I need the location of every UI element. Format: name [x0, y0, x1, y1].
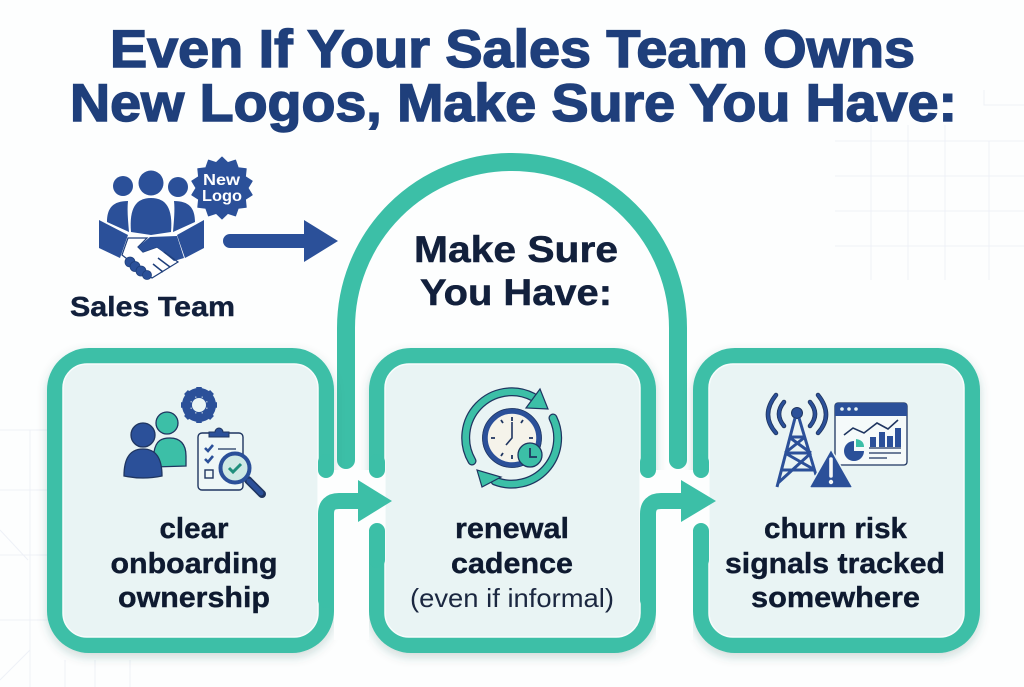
text: clear onboarding ownership [110, 513, 278, 614]
text: renewal cadence: cadence [451, 548, 573, 580]
title: New Logos, Make Sure You Have: [70, 74, 957, 133]
panel: clear onboarding ownership [47, 348, 334, 653]
badge: new logo: Logo [202, 188, 242, 205]
flow gaps in panel borders [318, 470, 709, 640]
title: Even If Your Sales Team Owns [110, 20, 915, 79]
arch connector [346, 162, 678, 460]
icon: tower, dashboard and warning [768, 395, 907, 488]
badge: new logo: New [203, 172, 241, 189]
label: sales team: Sales Team [70, 291, 235, 322]
title [70, 20, 957, 133]
badge: new logo [192, 157, 252, 219]
heading: make sure you have: You Have: [420, 272, 612, 313]
text: renewal cadence: renewal [455, 513, 569, 545]
text: clear onboarding ownership: onboarding [110, 548, 278, 580]
panel: churn risk signals [693, 348, 980, 653]
icon: onboarding team and checklist [124, 387, 262, 494]
heading: make sure you have [414, 229, 618, 313]
icon: renewal clock [466, 389, 558, 487]
text: clear onboarding ownership: clear [160, 513, 228, 545]
text: churn risk signals tracked somewhere: churn risk [764, 513, 908, 545]
text: churn risk signals tracked somewhere: signals tracked [725, 548, 945, 580]
icon: sales team handshake [99, 170, 204, 280]
arrow: sales team to make sure [223, 220, 338, 262]
arrow: renewal to churn [681, 480, 716, 522]
text: renewal cadence: (even if informal) [410, 583, 614, 613]
text: churn risk signals tracked somewhere: somewhere [751, 582, 920, 614]
heading: make sure you have: Make Sure [414, 229, 618, 270]
text: renewal cadence [410, 513, 614, 613]
border ends around flow gaps [326, 462, 701, 600]
panel: renewal cadence [369, 348, 656, 653]
text: churn risk signals tracked somewhere [725, 513, 945, 614]
arrow: onboarding to renewal [358, 480, 392, 522]
text: clear onboarding ownership: ownership [118, 582, 270, 614]
